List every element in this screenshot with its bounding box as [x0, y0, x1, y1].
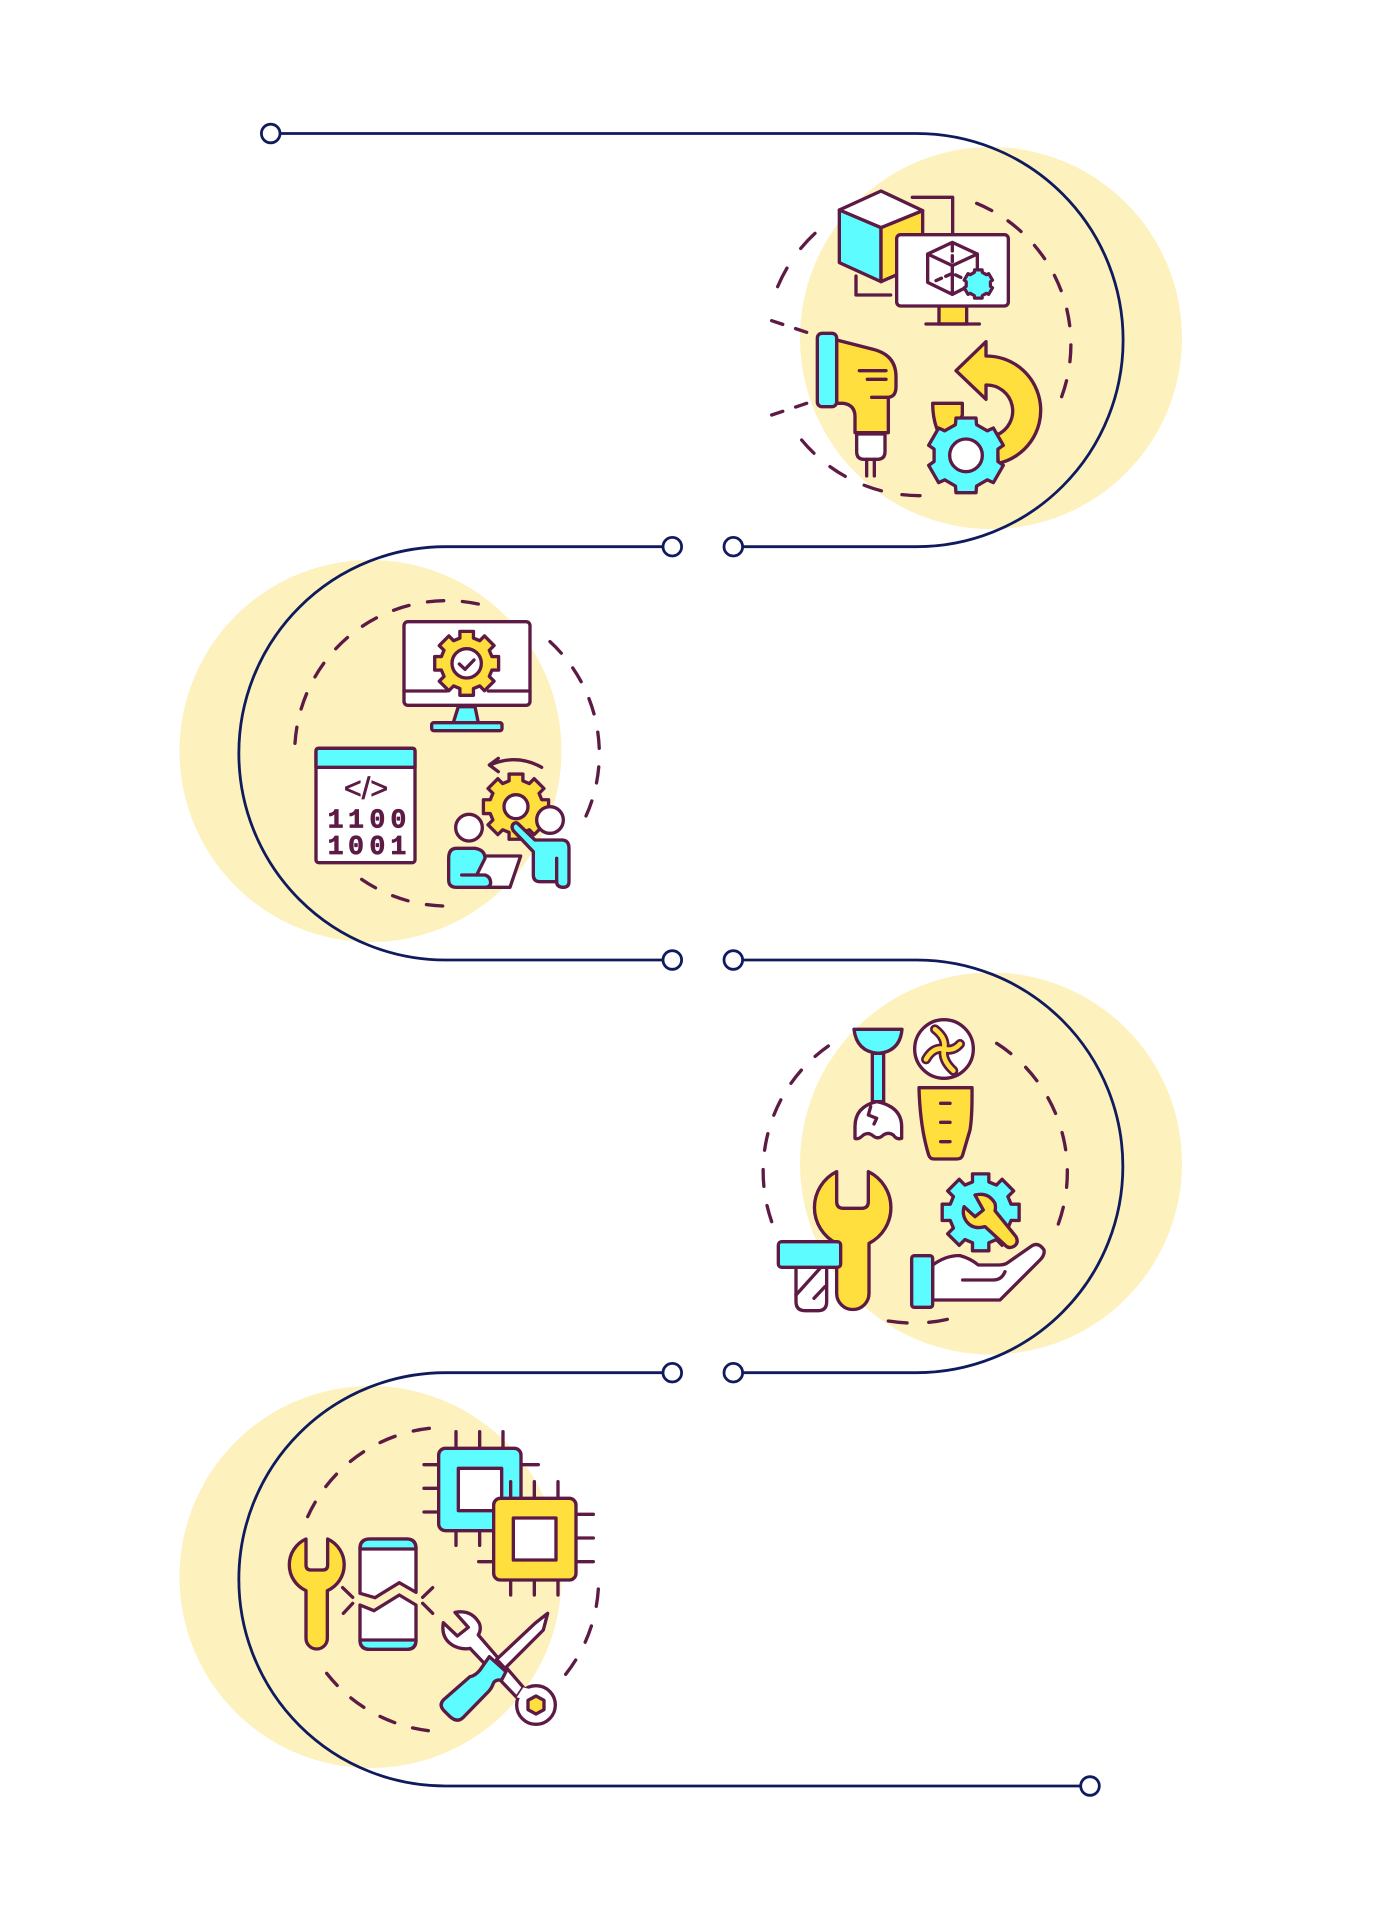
icon: monitor with check gear [404, 622, 530, 731]
dashed ring [772, 203, 1071, 496]
icon: code window: 1100 [328, 806, 406, 836]
icon: yellow chip [479, 1482, 593, 1595]
yellow circle: step 2 [180, 560, 562, 942]
icon: cup [919, 1088, 972, 1159]
icon: broken lamp [854, 1029, 902, 1139]
icon: bit holder [778, 1242, 841, 1267]
icon: monitor with cube model [897, 235, 1008, 324]
yellow circle: step 1 [800, 147, 1182, 529]
dashed ring [295, 601, 599, 906]
icon: big wrench [814, 1172, 891, 1309]
icon: cyan chip [424, 1432, 538, 1545]
icon group: hardware repair [289, 1428, 598, 1731]
icon group: 3D modelling and machining [772, 191, 1071, 496]
icon: wrench [289, 1539, 344, 1649]
timeline connector path [239, 124, 1123, 1795]
icon group: software and code [295, 601, 599, 906]
icon: fan [915, 1020, 973, 1078]
icon: gear with return arrow [929, 342, 1041, 493]
icon: code window: </> [344, 771, 388, 805]
icon: crossed wrench and screwdriver [441, 1612, 555, 1724]
icon: drill bit [796, 1267, 827, 1311]
icon group: broken parts and repair [763, 1020, 1067, 1323]
icon: broken phone [343, 1539, 433, 1649]
icon: 3D cube [839, 191, 953, 295]
icon: drill [817, 333, 896, 476]
icon: team adjusting gear [449, 758, 569, 887]
icon: gear with wrench in hand [912, 1174, 1044, 1307]
icon: code window [316, 748, 415, 863]
yellow circle: step 4 [180, 1386, 562, 1768]
icon: code window: 1001 [328, 833, 406, 863]
yellow circle: step 3 [800, 972, 1182, 1354]
dashed ring [763, 1043, 1067, 1323]
dashed ring [308, 1428, 598, 1731]
